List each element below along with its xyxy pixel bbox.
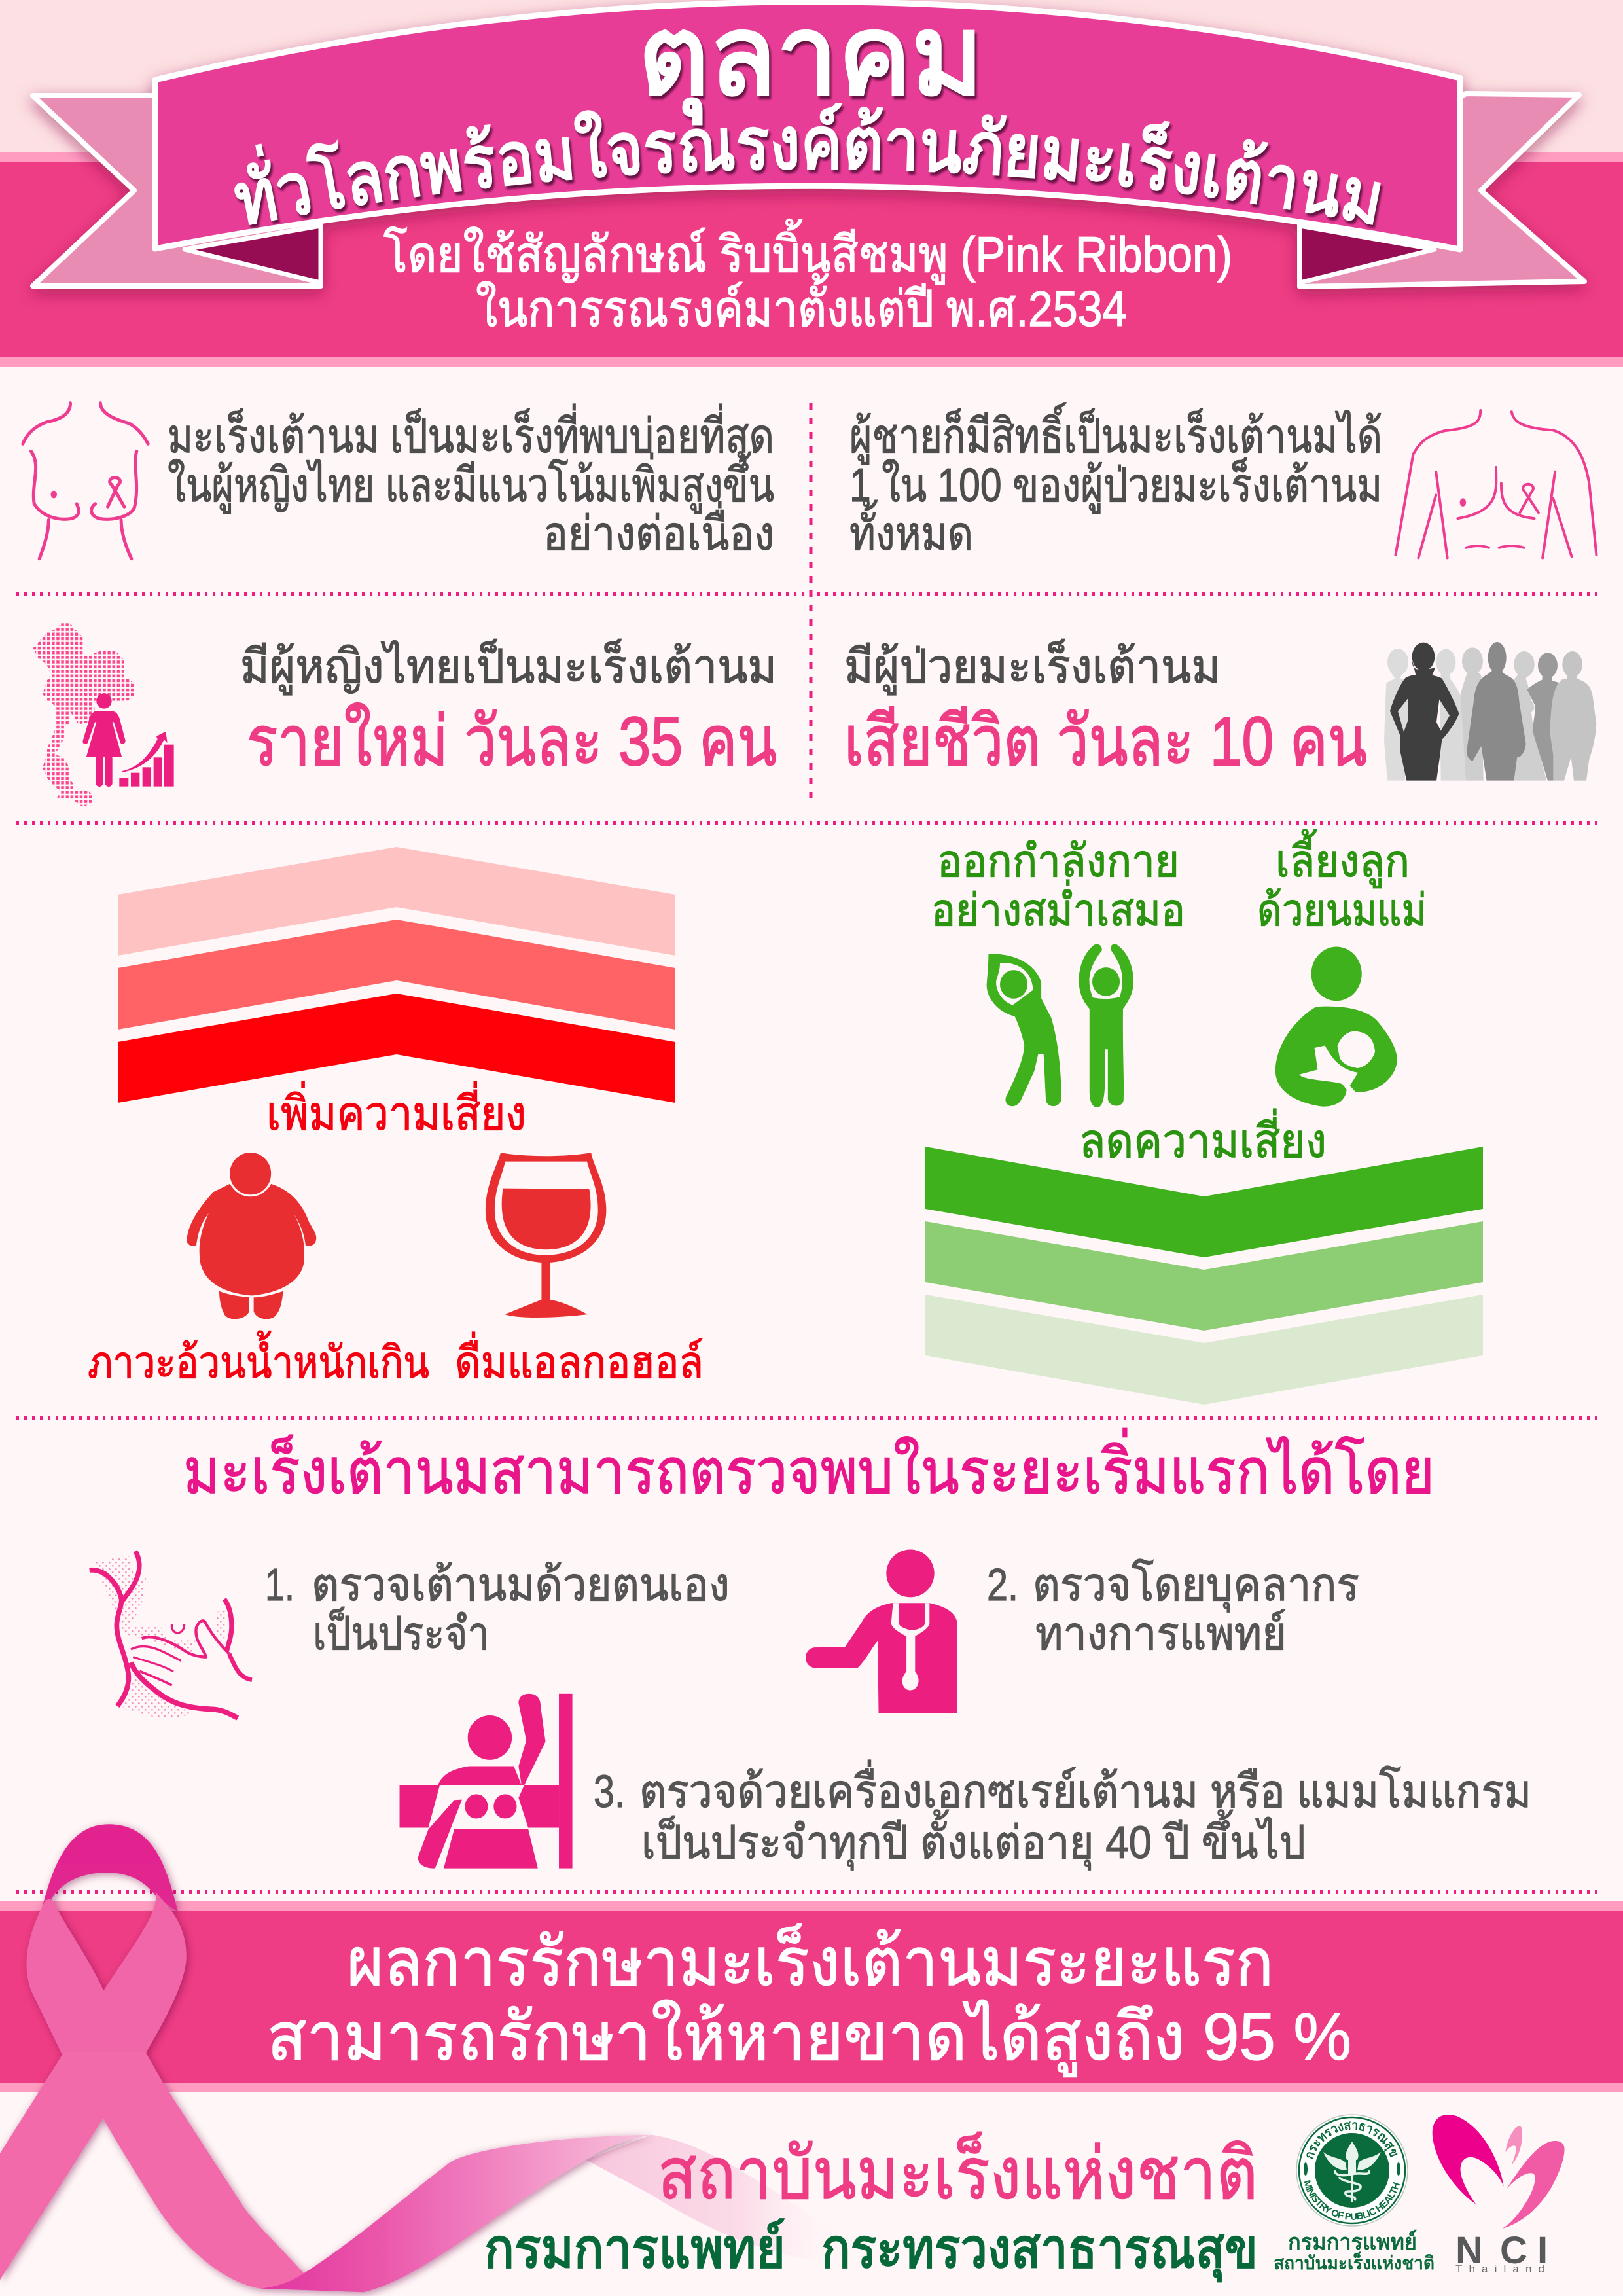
heading: decrease risk: ลดความเสี่ยง	[1079, 1109, 1327, 1168]
logo text: department / institute	[1274, 2229, 1435, 2273]
subtitle	[383, 219, 1232, 337]
text: step 2	[987, 1558, 1359, 1659]
label: exercise	[931, 836, 1185, 935]
heading: increase risk: เพิ่มความเสี่ยง	[266, 1081, 526, 1140]
label: breastfeeding	[1257, 829, 1427, 935]
icon: wine glass	[486, 1153, 606, 1318]
dotted map	[33, 623, 134, 807]
banner right tail	[1300, 94, 1584, 287]
woman figure	[82, 693, 126, 787]
text: men can get breast cancer	[849, 402, 1382, 560]
icon: pink ribbon	[0, 1824, 847, 2292]
growth chart	[119, 732, 174, 787]
logo: NCI Thailand: NCI	[1455, 2229, 1548, 2272]
text: step 3: 3.	[594, 1766, 625, 1817]
icon: breastfeeding mother	[1275, 947, 1397, 1107]
banner main arc	[155, 2, 1460, 249]
logo: NCI Thailand: Thailand	[1455, 2263, 1544, 2275]
dotted dividers	[16, 403, 1603, 1892]
icon: crowd of women silhouettes	[1384, 642, 1596, 781]
icon: female breasts	[23, 403, 148, 559]
text: men can get breast cancer: 1 ใน 100 ของผู้ป่วยมะเร็งเต้านม	[849, 457, 1382, 514]
logo: ministry of public health	[1296, 2114, 1408, 2227]
stat: deaths per day	[844, 639, 1367, 780]
footer: department and ministry	[484, 2217, 1258, 2283]
text: step 1: ตรวจเต้านมด้วยตนเอง	[312, 1559, 730, 1610]
icon: doctor with stethoscope	[806, 1549, 957, 1713]
subtitle: ในการรณรงค์มาตั้งแต่ปี พ.ศ.2534	[476, 273, 1127, 337]
stat: new cases per day: มีผู้หญิงไทยเป็นมะเร็งเต้านม	[240, 639, 777, 695]
label: exercise: ออกกำลังกาย	[937, 836, 1179, 886]
logo: ministry of public health: MINISTRY OF PUBLIC HEALTH	[1304, 2179, 1400, 2220]
panel: increase risk	[88, 847, 704, 1388]
banner right fold	[1300, 226, 1435, 283]
text: step 1: เป็นประจำ	[313, 1607, 490, 1659]
stat: deaths per day: เสียชีวิต วันละ 10 คน	[844, 703, 1367, 780]
text: step 2: ทางการแพทย์	[1035, 1608, 1287, 1659]
label: breastfeeding: เลี้ยงลูก	[1275, 829, 1410, 888]
ribbon banner	[33, 2, 1584, 287]
ribbon loop back	[41, 1824, 178, 1912]
text: most common cancer: ในผู้หญิงไทย และมีแนวโน้มเพิ่มสูงขึ้น	[168, 451, 774, 514]
callout: treatment success: สามารถรักษาให้หายขาดได้สูงถึง 95 %	[267, 2000, 1351, 2077]
text: men can get breast cancer: ผู้ชายก็มีสิทธิ์เป็นมะเร็งเต้านมได้	[849, 402, 1382, 465]
text: most common cancer: มะเร็งเต้านม เป็นมะเร็งที่พบบ่อยที่สุด	[168, 404, 774, 465]
callout: treatment success	[267, 1923, 1351, 2077]
ribbon legs	[0, 2052, 304, 2289]
chevrons: rising risk	[118, 847, 675, 1103]
icon: male chest	[1396, 410, 1596, 558]
text: step 3: ตรวจด้วยเครื่องเอกซเรย์เต้านม หรือ แมมโมแกรม	[639, 1760, 1531, 1817]
banner left fold	[185, 226, 321, 283]
text: most common cancer	[168, 404, 774, 560]
footer: department and ministry: กระทรวงสาธารณสุข	[821, 2217, 1258, 2283]
icon: breast self-exam	[90, 1551, 252, 1719]
label: exercise: อย่างสม่ำเสมอ	[931, 880, 1185, 935]
logo: NCI Thailand	[1433, 2115, 1565, 2275]
chevrons: falling risk	[925, 1147, 1483, 1405]
ribbon rising tail	[260, 2135, 651, 2292]
panel: treatment result band	[0, 1901, 1623, 2092]
label: alcohol: ดื่มแอลกอฮอล์	[455, 1332, 704, 1388]
banner left tail	[33, 96, 321, 286]
icon: mammogram machine	[400, 1694, 573, 1869]
stat: new cases per day: รายใหม่ วันละ 35 คน	[247, 703, 777, 780]
stat: new cases per day	[240, 639, 777, 780]
callout: treatment success: ผลการรักษามะเร็งเต้านมระยะแรก	[347, 1923, 1274, 2000]
heading: early detection: มะเร็งเต้านมสามารถตรวจพบในระยะเริ่มแรกได้โดย	[183, 1428, 1435, 1507]
text: most common cancer: อย่างต่อเนื่อง	[543, 501, 774, 560]
icon: thailand map with woman and growth chart	[33, 623, 174, 807]
text: step 1	[265, 1559, 730, 1659]
stat: deaths per day: มีผู้ป่วยมะเร็งเต้านม	[844, 639, 1221, 695]
text: step 1: 1.	[265, 1559, 294, 1610]
logo text: department / institute: กรมการแพทย์	[1288, 2229, 1417, 2255]
ribbon fading tail	[586, 2135, 847, 2260]
label: overweight: ภาวะอ้วนน้ำหนักเกิน	[88, 1331, 429, 1388]
ribbon loop front	[26, 1892, 187, 2054]
subtitle: โดยใช้สัญลักษณ์ ริบบิ้นสีชมพู (Pink Ribbon)	[383, 219, 1232, 285]
text: step 2: 2.	[987, 1559, 1018, 1610]
panel: header band	[0, 0, 1623, 367]
text: men can get breast cancer: ทั้งหมด	[849, 499, 973, 560]
icon: overweight person	[187, 1151, 316, 1319]
footer: department and ministry: กรมการแพทย์	[484, 2217, 785, 2279]
text: step 2: ตรวจโดยบุคลากร	[1033, 1558, 1359, 1613]
label: breastfeeding: ด้วยนมแม่	[1257, 886, 1427, 935]
icon: exercising people	[987, 944, 1133, 1107]
text: step 3: เป็นประจำทุกปี ตั้งแต่อายุ 40 ปี ขึ้นไป	[641, 1809, 1306, 1871]
logo text: department / institute: สถาบันมะเร็งแห่งชาติ	[1274, 2251, 1435, 2273]
footer: institute name: สถาบันมะเร็งแห่งชาติ	[658, 2131, 1258, 2214]
logo: ministry of public health: กระทรวงสาธารณสุข	[1306, 2121, 1398, 2159]
title: curved headline: ทั่วโลกพร้อมใจรณรงค์ต้านภัยมะเร็งเต้านม	[234, 103, 1384, 230]
text: step 3	[594, 1760, 1531, 1871]
panel: decrease risk	[925, 829, 1483, 1405]
